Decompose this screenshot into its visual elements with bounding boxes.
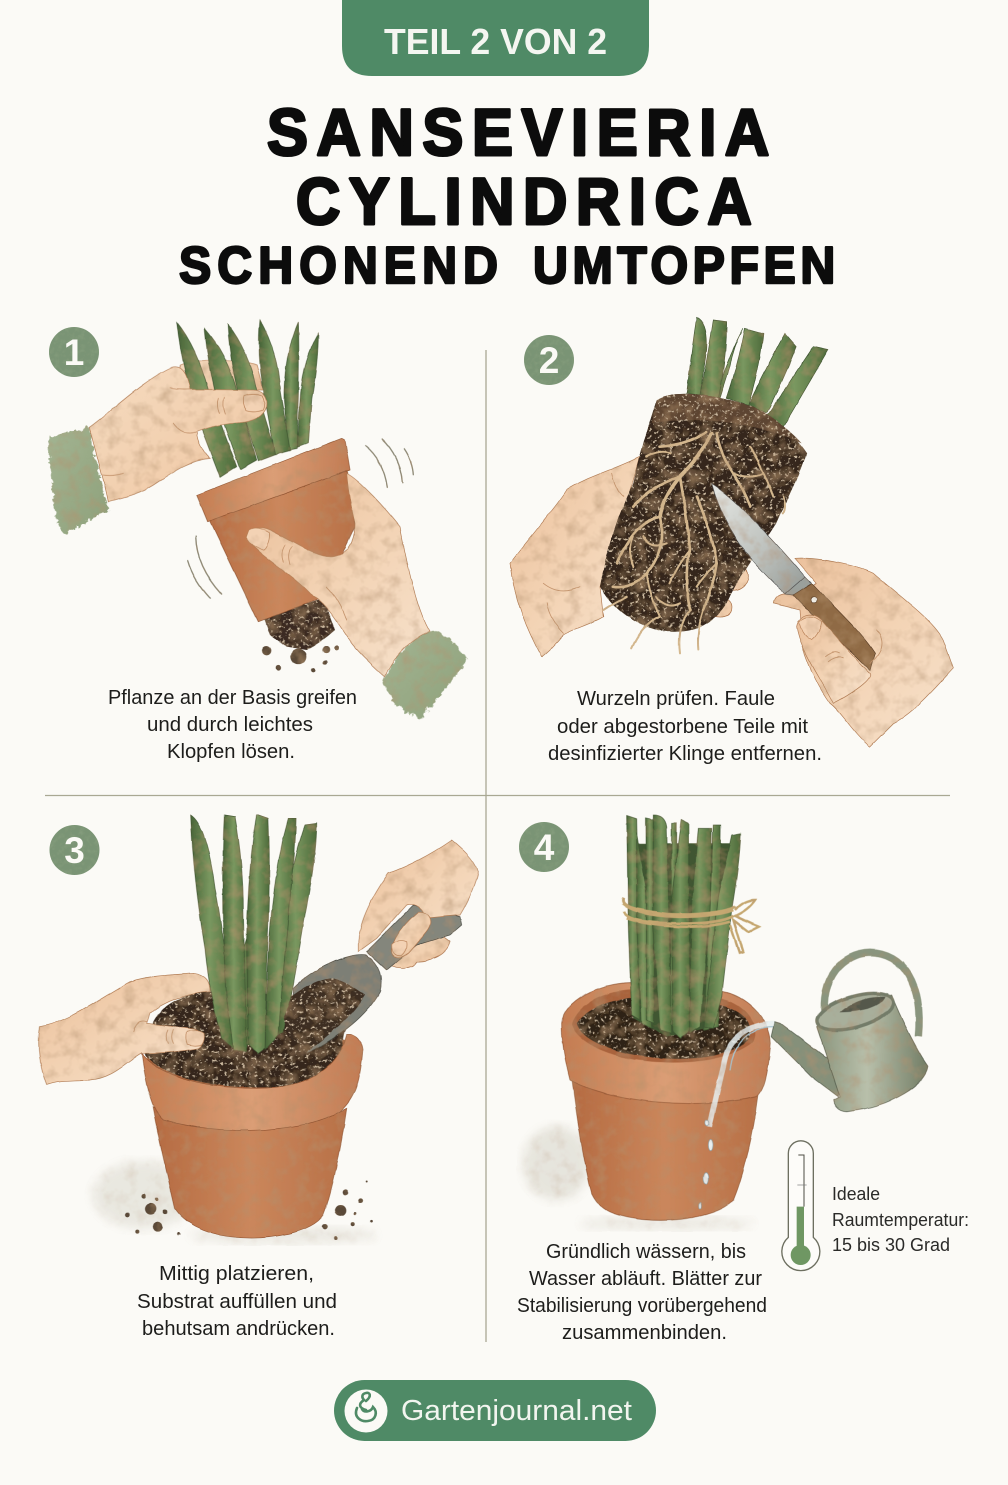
caption step 2: [548, 687, 822, 765]
caption step 3: Substrat auffüllen und: [137, 1290, 337, 1313]
panel: step 4: [517, 815, 969, 1344]
caption step 3: behutsam andrücken.: [142, 1317, 335, 1340]
illustration: filling substrate with a scoop: [39, 814, 478, 1244]
temperature note: [832, 1184, 969, 1255]
illustration: watering and tied leaves: [523, 815, 928, 1230]
step number 4: 4: [534, 827, 555, 868]
caption step 4: Gründlich wässern, bis: [546, 1240, 746, 1263]
caption step 1: Klopfen lösen.: [167, 740, 295, 763]
header pill: TEIL 2 VON 2: [384, 21, 607, 62]
caption step 1: Pflanze an der Basis greifen: [108, 686, 357, 709]
step number 1: 1: [64, 332, 84, 373]
step number 3: 3: [64, 830, 85, 871]
caption step 3: Mittig platzieren,: [159, 1262, 314, 1285]
icon: sprout in bowl: [356, 1393, 376, 1421]
temperature note: 15 bis 30 Grad: [832, 1235, 950, 1255]
step number 1: [49, 327, 99, 377]
title: [179, 95, 835, 294]
illustration: checking roots with a knife: [510, 317, 953, 747]
illustration: loosening the plant from the pot: [48, 320, 468, 720]
caption step 3: [137, 1262, 337, 1340]
caption step 4: Stabilisierung vorübergehend: [517, 1294, 767, 1317]
step number 2: 2: [539, 340, 559, 381]
caption step 4: Wasser abläuft. Blätter zur: [529, 1267, 762, 1290]
caption step 2: oder abgestorbene Teile mit: [557, 715, 808, 738]
caption step 2: Wurzeln prüfen. Faule: [577, 687, 775, 710]
temperature note: Raumtemperatur:: [832, 1210, 969, 1230]
panel: step 1: [48, 320, 468, 763]
caption step 1: [108, 686, 357, 763]
step number 2: [524, 335, 574, 385]
panel: step 3: [39, 814, 478, 1340]
header pill: [342, 0, 649, 76]
footer logo pill: [334, 1380, 656, 1441]
title: UMTOPFEN: [533, 236, 835, 294]
caption step 2: desinfizierter Klinge entfernen.: [548, 742, 822, 765]
step number 4: [519, 822, 569, 872]
panel: step 2: [510, 317, 953, 765]
caption step 4: zusammenbinden.: [562, 1321, 727, 1344]
title: CYLINDRICA: [296, 164, 752, 238]
thermometer: [782, 1141, 820, 1271]
footer logo pill: Gartenjournal.net: [401, 1395, 632, 1427]
title: SANSEVIERIA: [267, 95, 769, 169]
title: SCHONEND: [179, 236, 498, 294]
step number 3: [50, 825, 100, 875]
caption step 4: [517, 1240, 767, 1344]
temperature note: Ideale: [832, 1184, 880, 1204]
caption step 1: und durch leichtes: [147, 713, 313, 736]
